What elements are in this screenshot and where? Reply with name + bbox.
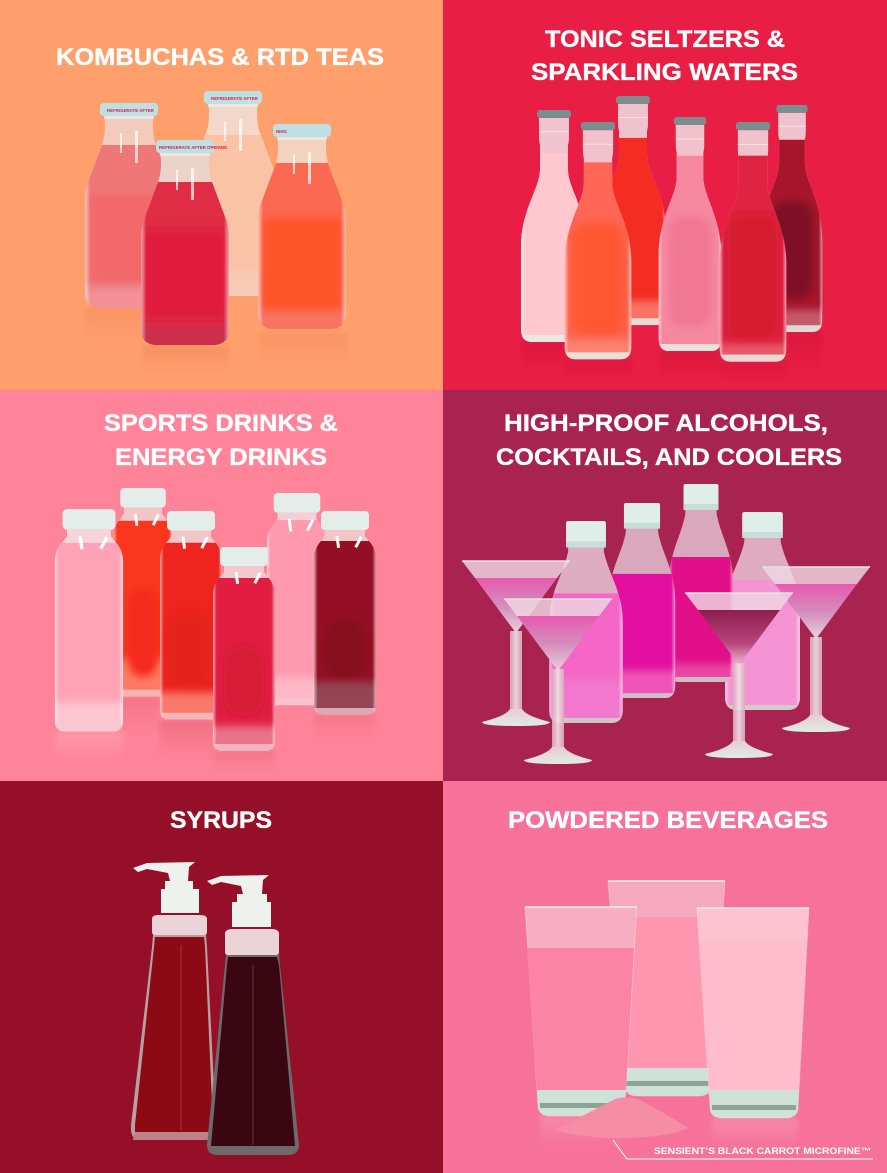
heading: tonic seltzers (531, 26, 798, 86)
bottle: orchid cooler (549, 521, 623, 723)
panel: high-proof alcohols, cocktails, coolers (443, 390, 887, 781)
heading: tonic seltzers: SPARKLING WATERS (531, 59, 798, 86)
bottle: dark burgundy tonic (770, 105, 822, 332)
bottle: crimson kombucha: REFRIGERATE AFTER OPENING (159, 145, 228, 150)
bottle: crimson kombucha (141, 140, 229, 345)
bottle: light pink cooler (725, 512, 800, 710)
bottle: red sports drink (160, 511, 222, 720)
bottle: pale peach kombucha (203, 91, 274, 296)
bottle: red-orange sports drink (114, 488, 171, 697)
syrup bottle: dark purple (207, 875, 299, 1155)
reflections under kombucha bottles (85, 307, 348, 375)
heading: sports drinks: SPORTS DRINKS & (104, 410, 338, 437)
glass: left (525, 907, 637, 1116)
heading: kombuchas: KOMBUCHAS & RTD TEAS (56, 44, 384, 71)
bottle: fuchsia cooler (612, 503, 676, 698)
martini glass: front right (685, 593, 793, 758)
bottle: orange tonic (564, 122, 632, 360)
heading: powdered beverages: POWDERED BEVERAGES (508, 807, 828, 834)
bottle: orange-red kombucha (258, 124, 346, 329)
bottle: pale pink tonic (520, 110, 578, 342)
bottle: orange-red kombucha: NING (276, 129, 288, 134)
panel: syrups (0, 781, 443, 1173)
bottle: dark maroon energy drink (314, 511, 376, 715)
bottle: pale peach kombucha: REFRIGERATE AFTER (211, 96, 259, 101)
bottle: crimson tonic (720, 122, 786, 362)
panel: sports and energy drinks (0, 390, 443, 781)
heading: tonic seltzers: TONIC SELTZERS & (545, 26, 785, 53)
bottle: salmon kombucha (85, 103, 161, 308)
powder pile (555, 1097, 688, 1138)
bottle: pink sports drink (54, 509, 124, 732)
bottle: rose tonic (658, 117, 721, 351)
heading: syrups: SYRUPS (170, 807, 272, 834)
heading: alcohols: HIGH-PROOF ALCOHOLS, (504, 410, 828, 437)
bottle: red tonic (612, 96, 665, 326)
heading: alcohols (496, 410, 842, 471)
bottle: light pink energy drink (266, 493, 325, 706)
heading: sports drinks (104, 410, 338, 471)
bottle: salmon kombucha: REFRIGERATE AFTER (107, 108, 155, 113)
panel: kombuchas and RTD teas (0, 0, 443, 390)
bottle: crimson sports drink (213, 547, 275, 751)
callout line (613, 1140, 873, 1159)
martini glass: back right (762, 567, 870, 732)
reflections under tonic bottles (521, 332, 822, 382)
reflections under glasses (540, 1116, 798, 1148)
reflections under sports bottles (55, 697, 375, 771)
heading: alcohols: COCKTAILS, AND COOLERS (496, 444, 842, 471)
glass: right (697, 908, 809, 1118)
martini glass: back left (462, 561, 570, 726)
panel: tonic seltzers and sparkling waters (443, 0, 887, 390)
bottle: magenta cooler (670, 484, 734, 682)
glass: back centre (608, 881, 725, 1096)
heading: sports drinks: ENERGY DRINKS (115, 444, 327, 471)
martini glass: front left (504, 599, 612, 764)
syrup bottle: red (131, 862, 216, 1140)
panel: powdered beverages (443, 781, 887, 1173)
callout label: SENSIENT’S BLACK CARROT MICROFINE™ (654, 1146, 871, 1156)
